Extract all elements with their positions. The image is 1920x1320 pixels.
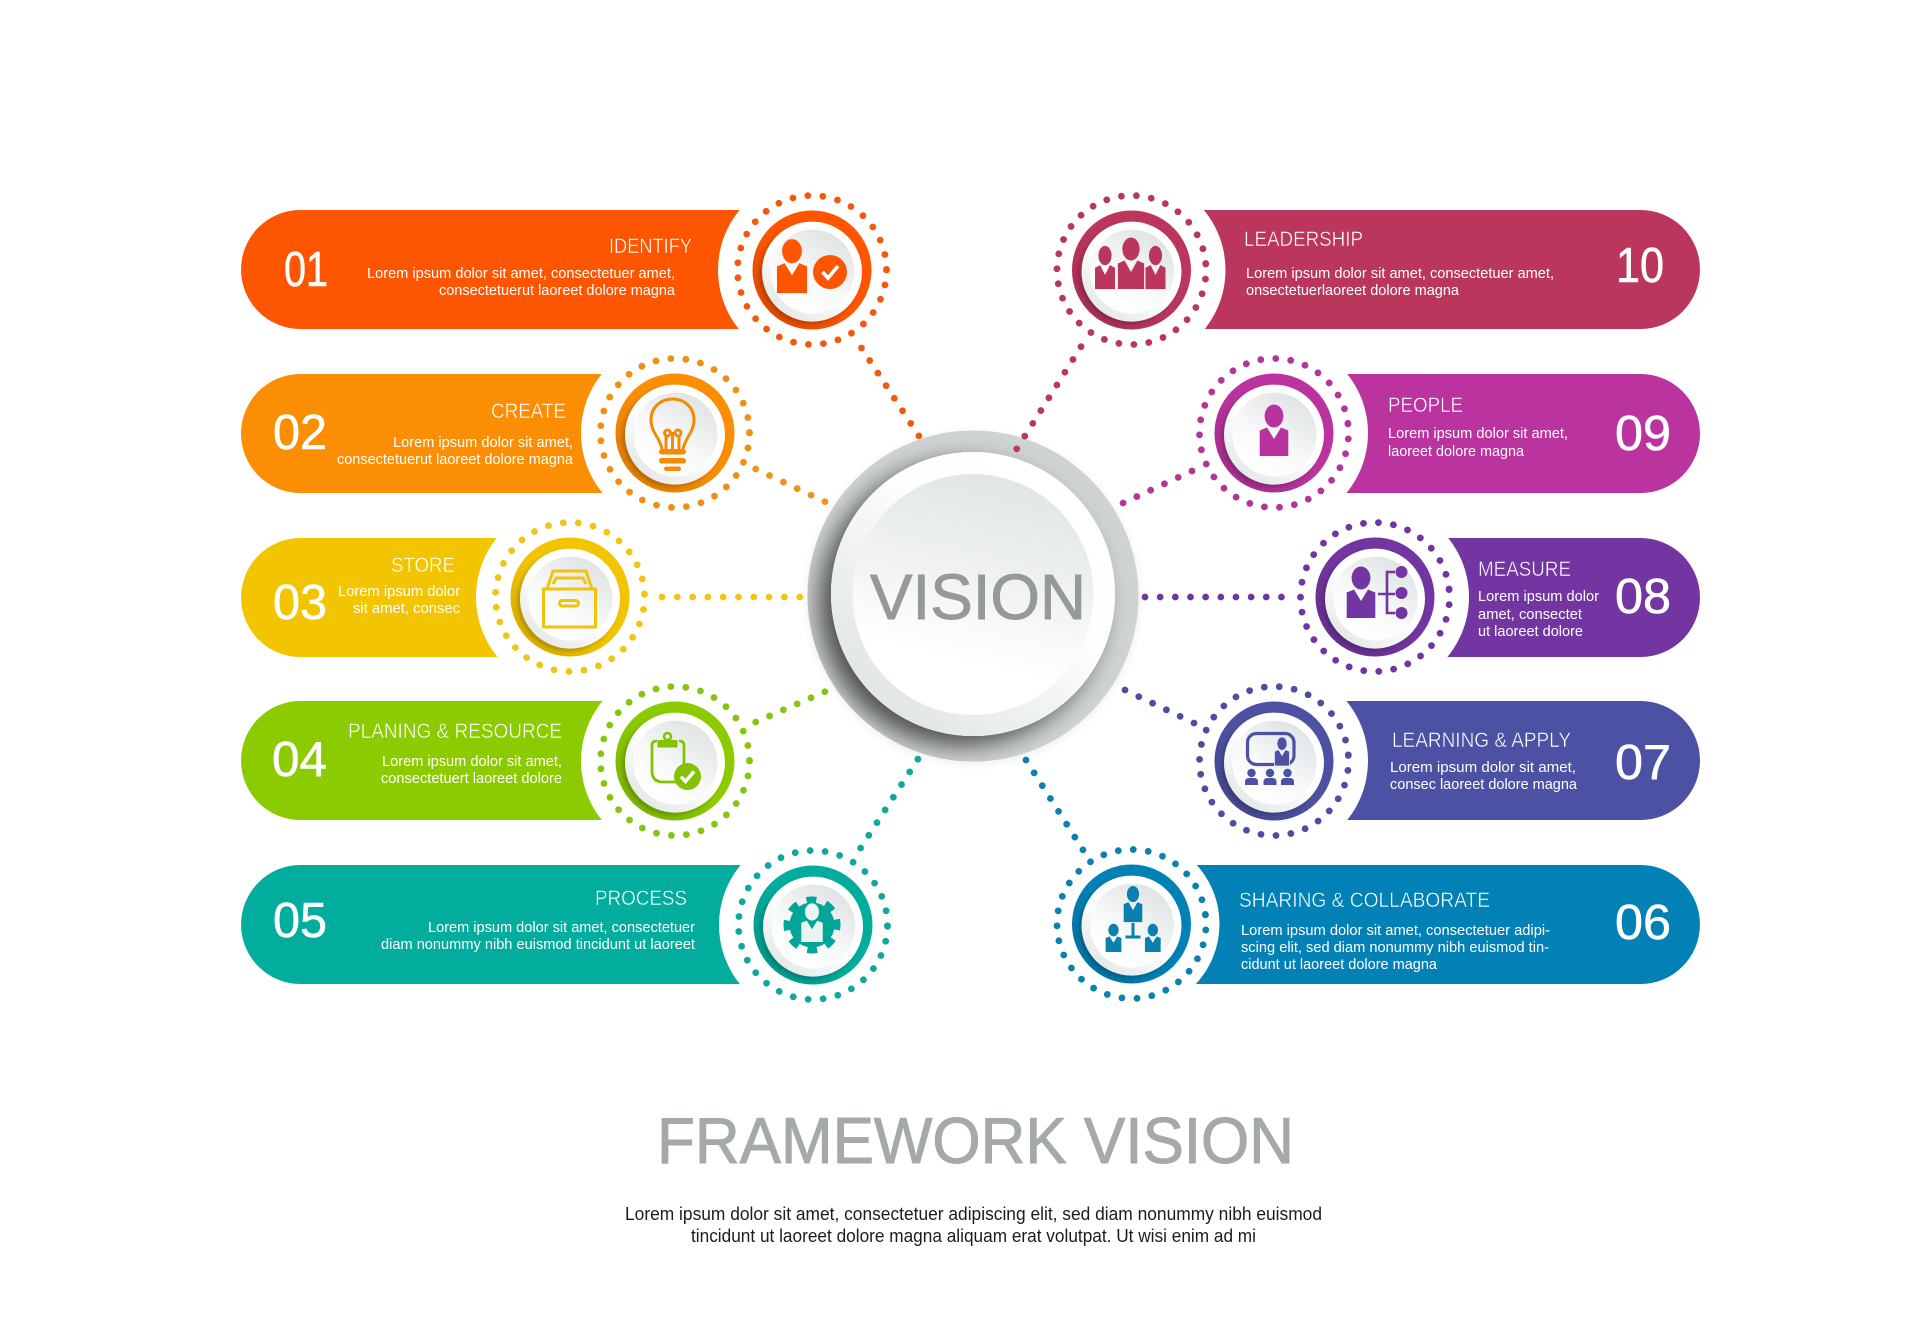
dotted ring 09 — [1191, 350, 1357, 516]
icon: archive box — [544, 571, 596, 627]
text block 07: Lorem ipsum dolor sit amet, — [1390, 759, 1576, 776]
connector 01 — [862, 348, 919, 436]
panel: step 02 create — [241, 339, 769, 527]
badge ring 01 — [752, 210, 872, 330]
dotted ring 10 — [1051, 190, 1212, 350]
text block 08: ut laoreet dolore — [1478, 623, 1583, 640]
dotted ring 05 — [737, 849, 889, 1001]
dotted ring 02 — [600, 358, 750, 508]
icon: person — [1260, 404, 1288, 456]
heading store: STORE — [391, 554, 455, 577]
text block 08 — [1478, 588, 1599, 640]
badge ring 02 — [616, 374, 734, 492]
icon: person with check — [777, 239, 847, 293]
number 10: 10 — [1616, 239, 1664, 293]
panel: step 04 planning and resource — [241, 667, 769, 855]
text block 08: amet, consectet — [1478, 606, 1583, 623]
number 07: 07 — [1615, 736, 1671, 790]
panel: step 09 people — [1180, 339, 1700, 527]
connector 02 — [756, 469, 825, 502]
text block 01: consectetuerut laoreet dolore magna — [439, 282, 676, 299]
dotted ring 01 — [738, 196, 886, 344]
badge ring 08 — [1316, 538, 1434, 656]
text block 09 — [1388, 425, 1568, 460]
text block 06 — [1241, 922, 1550, 973]
text block 05 — [381, 919, 696, 953]
connector 05 — [861, 759, 918, 848]
central vision button — [808, 430, 1138, 763]
text block 05: diam nonummy nibh euismod tincidunt ut laoreet — [381, 936, 696, 953]
heading create: CREATE — [491, 400, 566, 423]
number 01: 01 — [284, 243, 328, 297]
heading identify: IDENTIFY — [609, 235, 692, 258]
badge ring 03 — [510, 538, 630, 656]
number 06: 06 — [1615, 896, 1671, 950]
title: FRAMEWORK VISION — [657, 1104, 1294, 1177]
text block 01: Lorem ipsum dolor sit amet, consectetuer amet, — [367, 265, 675, 282]
text block 04 — [381, 753, 562, 787]
icon: person with branch chart — [1347, 566, 1408, 619]
footer description: tincidunt ut laoreet dolore magna aliquam erat volutpat. Ut wisi enim ad mi — [691, 1226, 1256, 1246]
text block 03: Lorem ipsum dolor — [338, 583, 460, 600]
text block 10: Lorem ipsum dolor sit amet, consectetuer amet, — [1246, 265, 1554, 282]
icon: gear with person — [787, 900, 837, 950]
heading planning and resource: PLANING & RESOURCE — [348, 720, 562, 743]
footer description: Lorem ipsum dolor sit amet, consectetuer adipiscing elit, sed diam nonummy nibh euismod — [625, 1204, 1322, 1224]
heading leadership: LEADERSHIP — [1244, 228, 1363, 251]
heading vision: VISION — [870, 561, 1086, 633]
connector 09 — [1123, 471, 1192, 503]
connector 04 — [756, 692, 825, 722]
text block 09: Lorem ipsum dolor sit amet, — [1388, 425, 1568, 442]
badge ring 05 — [754, 866, 872, 984]
text block 09: laoreet dolore magna — [1388, 443, 1525, 460]
connector 10 — [1017, 347, 1081, 449]
badge ring 10 — [1072, 210, 1191, 330]
heading sharing and collaborate: SHARING & COLLABORATE — [1239, 889, 1490, 912]
text block 10 — [1246, 265, 1554, 299]
dotted ring 06 — [1048, 841, 1215, 1007]
connector 08 — [1145, 594, 1282, 600]
panel: step 03 store — [241, 503, 664, 691]
badge ring 06 — [1072, 864, 1191, 984]
text block 02: Lorem ipsum dolor sit amet, — [393, 434, 573, 451]
panel: step 07 learning and apply — [1180, 667, 1700, 855]
connector 07 — [1125, 690, 1194, 723]
panel: step 08 measure — [1281, 503, 1700, 691]
text block 10: onsectetuerlaoreet dolore magna — [1246, 282, 1460, 299]
panel: step 06 sharing and collaborate — [1044, 836, 1700, 1012]
icon: team hierarchy — [1106, 886, 1161, 952]
badge ring 04 — [616, 702, 734, 820]
text block 04: Lorem ipsum dolor sit amet, — [382, 753, 562, 770]
heading measure: MEASURE — [1478, 558, 1571, 581]
number 02: 02 — [273, 406, 327, 460]
text block 02 — [337, 434, 574, 468]
text block 06: Lorem ipsum dolor sit amet, consectetuer adipi- — [1241, 922, 1550, 939]
dotted ring 03 — [493, 520, 647, 674]
dotted ring 04 — [600, 686, 750, 836]
connector 06 — [1026, 760, 1083, 850]
text block 06: cidunt ut laoreet dolore magna — [1241, 956, 1438, 973]
connector 03 — [662, 594, 800, 600]
number 05: 05 — [273, 894, 327, 948]
icon: clipboard with check — [652, 733, 701, 790]
text block 03 — [338, 583, 460, 617]
footer description — [625, 1204, 1322, 1246]
text block 02: consectetuerut laoreet dolore magna — [337, 451, 574, 468]
heading learning and apply: LEARNING & APPLY — [1392, 729, 1571, 752]
badge ring 07 — [1214, 702, 1334, 820]
icon: light bulb — [651, 399, 694, 471]
text block 06: scing elit, sed diam nonummy nibh euismod tin- — [1241, 939, 1549, 956]
text block 01 — [367, 265, 676, 299]
text block 08: Lorem ipsum dolor — [1478, 588, 1599, 605]
text block 03: sit amet, consec — [353, 600, 460, 617]
panel: step 01 identify — [241, 176, 906, 364]
icon: presentation with audience — [1245, 734, 1294, 785]
icon: three people — [1095, 238, 1166, 289]
panel: step 05 process — [241, 831, 907, 1019]
text block 05: Lorem ipsum dolor sit amet, consectetuer — [428, 919, 695, 936]
number 03: 03 — [273, 576, 327, 630]
text block 07: consec laoreet dolore magna — [1390, 776, 1578, 793]
text block 07 — [1390, 759, 1578, 793]
dotted ring 07 — [1194, 681, 1354, 841]
number 08: 08 — [1615, 570, 1671, 624]
panel: step 10 leadership — [1038, 176, 1700, 364]
heading people: PEOPLE — [1388, 394, 1463, 417]
number 09: 09 — [1615, 407, 1671, 461]
badge ring 09 — [1214, 374, 1334, 492]
heading process: PROCESS — [595, 887, 687, 910]
number 04: 04 — [272, 733, 327, 787]
text block 04: consectetuert laoreet dolore — [381, 770, 562, 787]
dotted ring 08 — [1293, 515, 1457, 679]
